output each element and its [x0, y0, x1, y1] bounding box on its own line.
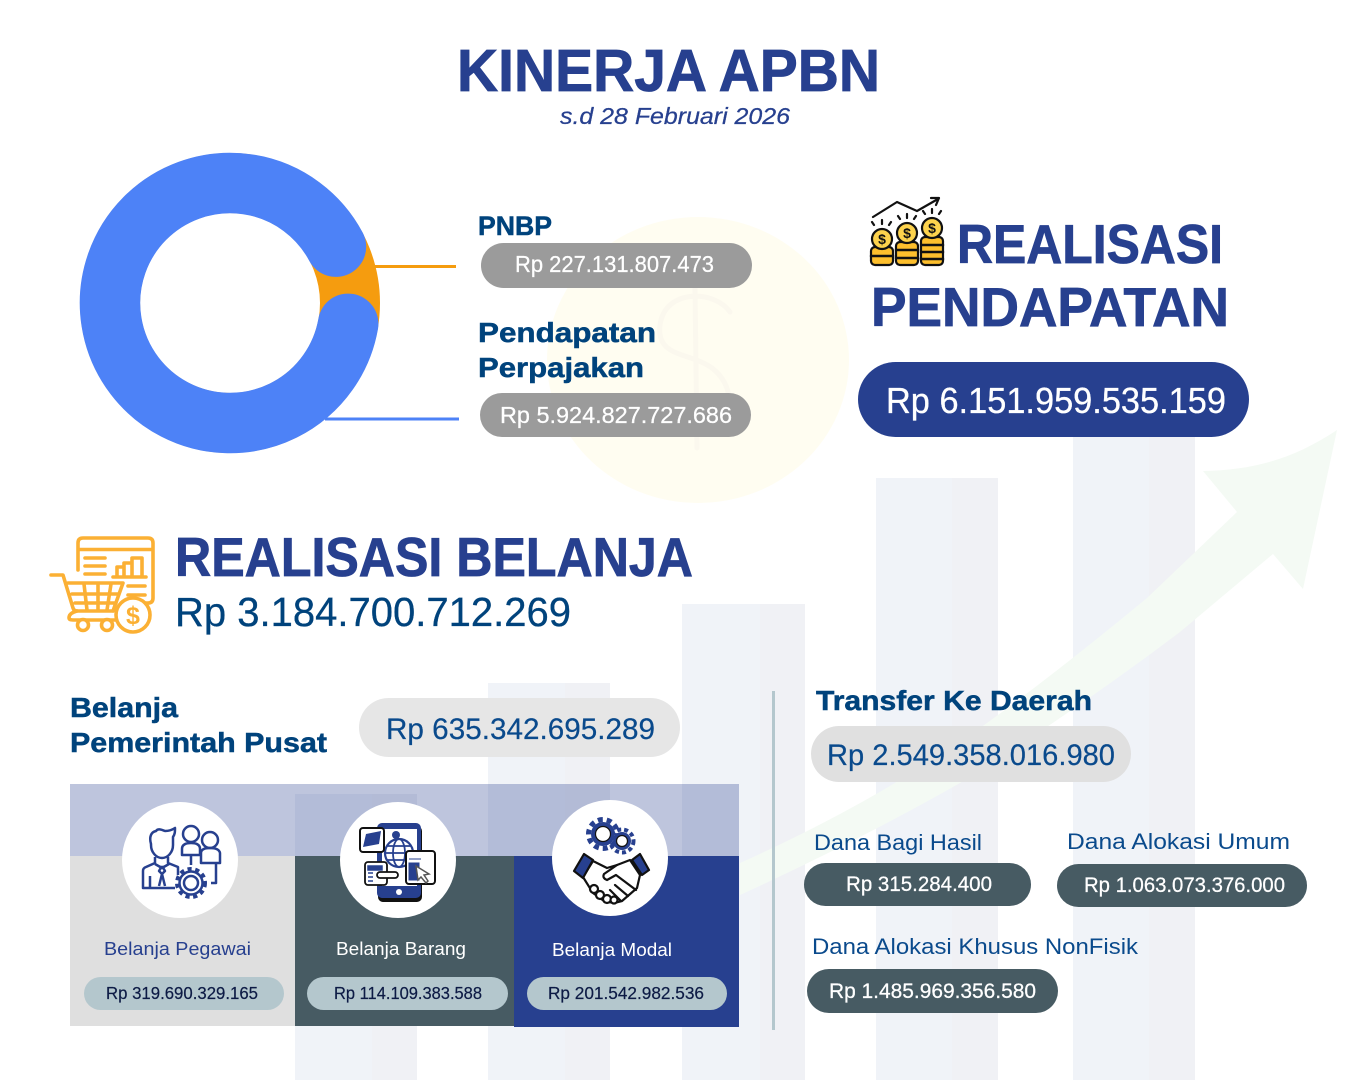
item: Dana Alokasi Khusus NonFisik: Dana Alokasi Khusus NonFisik [812, 934, 1139, 959]
value: total belanja: Rp 3.184.700.712.269 [175, 589, 571, 635]
item: Dana Alokasi Khusus NonFisik: Rp 1.485.969.356.580 [829, 980, 1036, 1003]
panel: Belanja Pegawai [70, 802, 295, 1026]
heading: Belanja Pemerintah Pusat [70, 692, 327, 758]
panel: Belanja Modal: Rp 201.542.982.536 [548, 983, 704, 1003]
heading: Realisasi Belanja: REALISASI BELANJA [175, 526, 693, 588]
panel: Belanja Pegawai: Rp 319.690.329.165 [106, 983, 258, 1003]
icon: handshake with gears [552, 800, 668, 916]
icon: coin stacks with rising arrow: $ [878, 231, 886, 247]
icon: shopping cart with report: $ [126, 602, 140, 630]
leader line: Pendapatan Perpajakan [325, 418, 459, 420]
label: Pendapatan Perpajakan [478, 317, 656, 383]
label: Pendapatan Perpajakan: Perpajakan [478, 352, 644, 383]
value pill: Belanja Pemerintah Pusat: Rp 635.342.695.289 [386, 713, 655, 746]
icon: coin stacks with rising arrow: $ [928, 220, 936, 236]
item: Dana Alokasi Umum: Dana Alokasi Umum [1067, 829, 1290, 854]
value pill: Belanja Pemerintah Pusat [359, 698, 680, 757]
heading: Realisasi Pendapatan: REALISASI [957, 213, 1223, 275]
background: faint rising arrow [740, 430, 1337, 895]
icon: shopping cart with report [51, 538, 153, 632]
panel: Belanja Modal: Belanja Modal [552, 940, 672, 960]
label: Pendapatan Perpajakan: Pendapatan [478, 317, 656, 348]
value pill: Pendapatan Perpajakan [480, 393, 751, 437]
panel: Belanja Barang [295, 802, 514, 1026]
title: KINERJA APBN [457, 38, 880, 104]
item: Dana Bagi Hasil: Dana Bagi Hasil [814, 830, 982, 855]
value pill: total pendapatan: Rp 6.151.959.535.159 [886, 380, 1226, 421]
panel band: translucent header [70, 784, 739, 856]
value pill: Transfer Ke Daerah: Rp 2.549.358.016.980 [827, 739, 1115, 772]
value pill: PNBP: Rp 227.131.807.473 [515, 251, 714, 277]
value pill: Pendapatan Perpajakan: Rp 5.924.827.727.686 [500, 402, 732, 428]
label: PNBP: PNBP [478, 211, 552, 241]
icon: coin stacks with rising arrow [871, 198, 943, 265]
subtitle: date: s.d 28 Februari 2026 [560, 103, 790, 129]
item: Dana Alokasi Umum: Rp 1.063.073.376.000 [1084, 874, 1285, 897]
panel: Belanja Barang: Rp 114.109.383.588 [334, 983, 482, 1003]
panel: Belanja Modal [514, 800, 739, 1027]
item: Dana Bagi Hasil [804, 830, 1031, 906]
item: Dana Alokasi Umum [1057, 829, 1307, 907]
item: Dana Bagi Hasil: Rp 315.284.400 [846, 873, 992, 896]
heading: Belanja Pemerintah Pusat: Pemerintah Pusat [70, 727, 327, 758]
icon: employees and gear [122, 802, 238, 918]
leader line: PNBP [375, 265, 456, 268]
icon: phone with globe and windows [340, 802, 456, 918]
value pill: total pendapatan [858, 362, 1249, 437]
item: Dana Alokasi Khusus NonFisik [807, 934, 1139, 1013]
value pill: PNBP [481, 243, 752, 288]
heading: Realisasi Pendapatan [871, 213, 1229, 338]
background: faint bar chart [295, 437, 1195, 1080]
panel: Belanja Pegawai: Belanja Pegawai [104, 939, 251, 959]
heading: Transfer Ke Daerah: Transfer Ke Daerah [816, 685, 1092, 716]
value pill: Transfer Ke Daerah [811, 726, 1131, 782]
icon: coin stacks with rising arrow: $ [903, 225, 911, 241]
background: faint gold coin [547, 217, 849, 503]
panel: Belanja Barang: Belanja Barang [336, 939, 466, 959]
heading: Belanja Pemerintah Pusat: Belanja [70, 692, 178, 723]
donut chart: revenue composition [110, 183, 350, 423]
heading: Realisasi Pendapatan: PENDAPATAN [871, 276, 1229, 338]
